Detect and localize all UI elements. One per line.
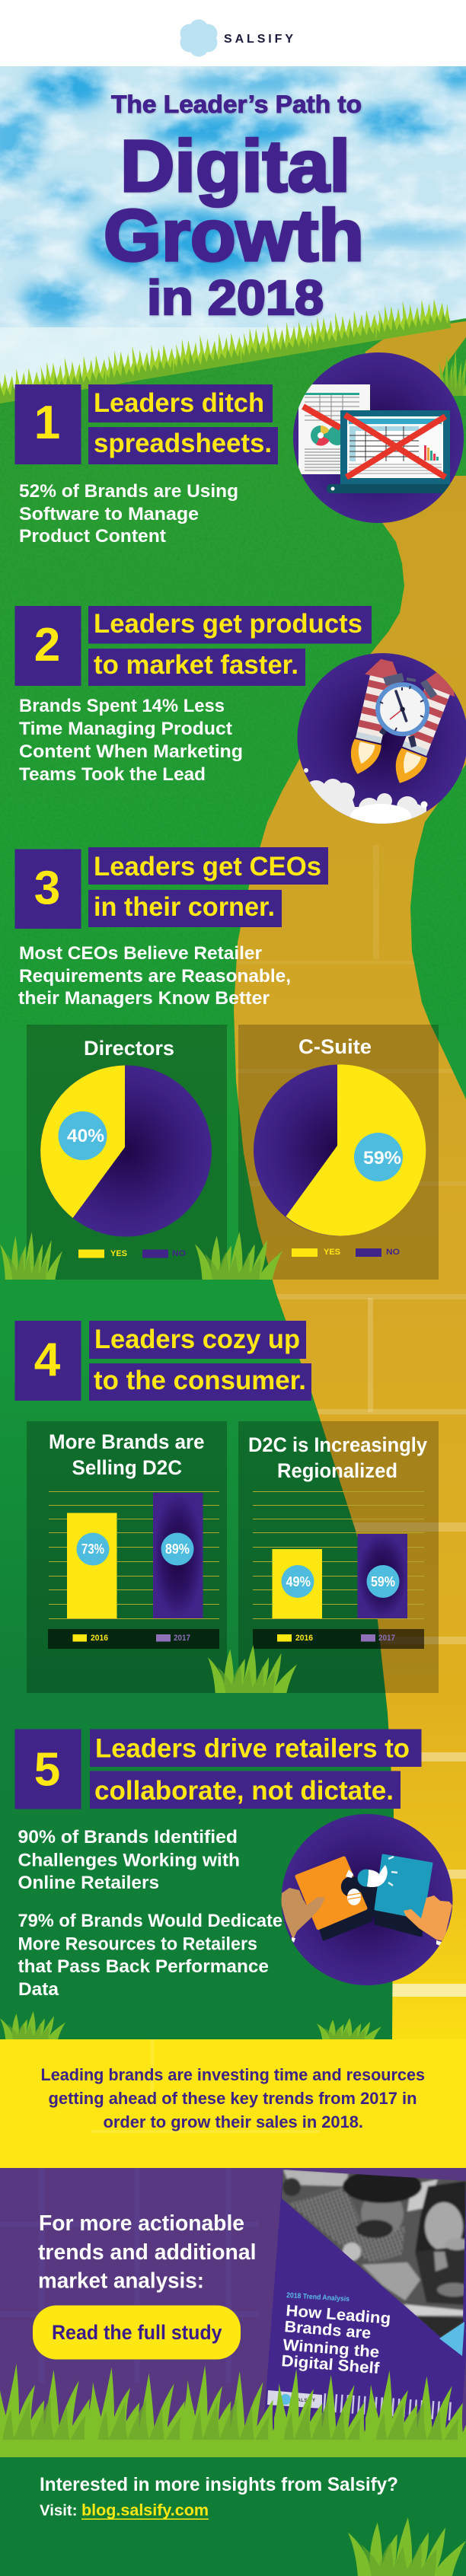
legend: directors: YES: [110, 1249, 127, 1258]
body 2: Teams Took the Lead: [19, 764, 206, 785]
panel: c-suite pie chart: [238, 1025, 439, 1280]
body 5: Challenges Working with: [18, 1850, 240, 1871]
body 1: 52% of Brands are Using: [19, 481, 238, 502]
value: 40%: [58, 1111, 107, 1160]
heading 5: [90, 1730, 422, 1809]
bar: 2017 89%: 89%: [165, 1541, 190, 1557]
body 5: 90% of Brands Identified: [18, 1827, 238, 1848]
legend: directors: NO: [172, 1249, 186, 1258]
pie: directors: [40, 1066, 212, 1236]
bar: 2016 49%: [273, 1549, 322, 1618]
legend: 2017: [378, 1634, 395, 1643]
legend: 2016: [91, 1634, 108, 1643]
body 5: that Pass Back Performance: [18, 1956, 269, 1977]
button: read the full study: [33, 2305, 241, 2360]
bar: 2016 73%: 73%: [81, 1541, 104, 1557]
cover text: How Leading: [286, 2302, 391, 2328]
title: Digital: [120, 126, 350, 207]
cyan corner: [439, 2322, 464, 2356]
button: read the full study: Read the full study: [52, 2321, 222, 2344]
banner: closing statement: Leading brands are investing time and resources: [41, 2065, 425, 2084]
title: Growth: [104, 195, 364, 276]
grass tuft: [348, 2517, 466, 2576]
legend: 2016: [295, 1634, 313, 1643]
panel: more brands are selling d2c: More Brands are: [49, 1430, 204, 1453]
sky background: [0, 64, 466, 416]
panel: directors pie chart: Directors: [84, 1037, 174, 1060]
number 5: [15, 1730, 81, 1809]
body 3: [18, 943, 291, 1009]
body 3: Requirements are Reasonable,: [19, 966, 291, 987]
legend: c-suite: NO: [386, 1248, 400, 1257]
heading 3: [88, 847, 328, 927]
section 5: [0, 1730, 452, 2039]
legend: c-suite: [292, 1248, 400, 1257]
icon: salsify flower: [180, 20, 218, 56]
number 2: 2: [34, 619, 60, 671]
grass tuft right of circle: [439, 350, 466, 396]
cover photo: [274, 2166, 466, 2364]
footer: Visit:: [40, 2503, 78, 2520]
legend: directors: [78, 1249, 186, 1258]
cover text: 2018 Trend Analysis: [286, 2291, 350, 2303]
cover text: Winning the: [282, 2336, 380, 2361]
body 1: Software to Manage: [19, 504, 199, 524]
number 3: [15, 850, 81, 929]
legend: [48, 1629, 219, 1649]
panel: d2c is increasingly regionalized: [238, 1421, 439, 1693]
grass tufts: [0, 1232, 282, 1280]
footer: [0, 2457, 466, 2576]
pie: c-suite: [254, 1064, 426, 1236]
footer: blog.salsify.com: [81, 2501, 209, 2520]
grass tuft: [208, 1645, 297, 1693]
panel: c-suite pie chart: C-Suite: [298, 1035, 372, 1058]
legend: [253, 1629, 424, 1649]
number 4: 4: [34, 1334, 61, 1386]
body 5: Data: [18, 1979, 59, 2000]
body 2: Content When Marketing: [19, 741, 243, 762]
grass foreground: [0, 2364, 466, 2457]
heading 5: Leaders drive retailers to: [95, 1734, 410, 1763]
value: 59%: [354, 1133, 403, 1181]
panel: d2c is increasingly regionalized: D2C is Increasingly: [248, 1433, 427, 1456]
heading 1: Leaders ditch: [94, 388, 264, 418]
title: [104, 91, 364, 325]
cta text: market analysis:: [38, 2268, 204, 2293]
heading 5: collaborate, not dictate.: [94, 1776, 394, 1806]
bar: 2017 89%: [153, 1493, 203, 1618]
body 5: More Resources to Retailers: [18, 1934, 257, 1955]
number 1: [15, 384, 81, 464]
heading 2: Leaders get products: [94, 609, 362, 639]
heading 4: [89, 1321, 311, 1401]
cover footer: SALSIFY: [294, 2399, 315, 2403]
heading 3: Leaders get CEOs: [94, 852, 321, 882]
cover text: Brands are: [284, 2318, 372, 2342]
cover footer: [267, 2390, 455, 2412]
body 1: Product Content: [19, 526, 166, 547]
body 5: [18, 1827, 282, 2000]
cta text: [38, 2211, 256, 2293]
legend: c-suite: YES: [324, 1248, 340, 1257]
grass horizon: [0, 294, 451, 409]
bar: 2016 49%: 49%: [286, 1574, 311, 1589]
banner: closing statement: getting ahead of these key trends from 2017 in: [49, 2089, 417, 2108]
footer: Interested in more insights from Salsify?: [40, 2474, 398, 2495]
grass tufts: [0, 2011, 381, 2039]
number 2: [15, 606, 81, 686]
cta text: For more actionable: [39, 2211, 244, 2236]
book cover: [263, 2166, 466, 2440]
body 3: their Managers Know Better: [18, 988, 270, 1009]
heading 4: to the consumer.: [94, 1366, 306, 1395]
panel: call to action: [0, 2166, 466, 2457]
heading 2: [88, 606, 372, 686]
cover text: Digital Shelf: [281, 2352, 381, 2377]
title: in 2018: [147, 270, 324, 325]
heading 2: to market faster.: [94, 650, 298, 680]
heading 4: Leaders cozy up: [94, 1325, 300, 1354]
value: 40%: 40%: [67, 1126, 104, 1146]
body 5: 79% of Brands Would Dedicate: [18, 1911, 282, 1931]
panel: more brands are selling d2c: [27, 1421, 227, 1693]
heading 1: spreadsheets.: [94, 429, 272, 458]
cover text: [281, 2291, 391, 2377]
bar: 2017 59%: [358, 1534, 407, 1618]
body 2: [19, 696, 243, 785]
body 5: Online Retailers: [18, 1873, 159, 1893]
number 4: [15, 1321, 81, 1401]
number 3: 3: [34, 862, 60, 915]
bar: 2017 59%: 59%: [371, 1574, 395, 1589]
section 4: [15, 1321, 439, 1693]
logo: [180, 20, 293, 56]
wordmark: SALSIFY: [224, 33, 293, 46]
bar: 2016 73%: [67, 1513, 117, 1618]
section 3: [0, 847, 439, 1280]
cta text: trends and additional: [38, 2240, 256, 2265]
heading 1: [88, 384, 278, 464]
panel: directors pie chart: [27, 1025, 227, 1280]
body 2: Brands Spent 14% Less: [19, 696, 225, 716]
number 5: 5: [34, 1743, 60, 1797]
left rocket: [350, 659, 401, 774]
banner: closing statement: order to grow their sales in 2018.: [104, 2112, 363, 2131]
title: The Leader’s Path to: [111, 91, 362, 118]
banner: closing statement: [0, 2039, 466, 2168]
section 2: [15, 606, 466, 830]
ground: green with path: [0, 318, 466, 2039]
body 1: [19, 481, 238, 547]
heading 3: in their corner.: [94, 892, 275, 922]
right rocket: [396, 672, 455, 783]
value: 59%: 59%: [363, 1148, 401, 1168]
icon: spreadsheets crossed out: [293, 352, 464, 523]
body 3: Most CEOs Believe Retailer: [19, 943, 262, 964]
section 1: [15, 352, 464, 547]
icon: alarm clock on rockets: [297, 653, 466, 830]
body 2: Time Managing Product: [19, 719, 232, 739]
number 1: 1: [34, 397, 60, 449]
icon: puzzle pieces and hands: [281, 1814, 452, 1985]
legend: 2017: [174, 1634, 190, 1643]
panel: more brands are selling d2c: Selling D2C: [72, 1456, 182, 1479]
panel: d2c is increasingly regionalized: Regionalized: [277, 1459, 397, 1482]
